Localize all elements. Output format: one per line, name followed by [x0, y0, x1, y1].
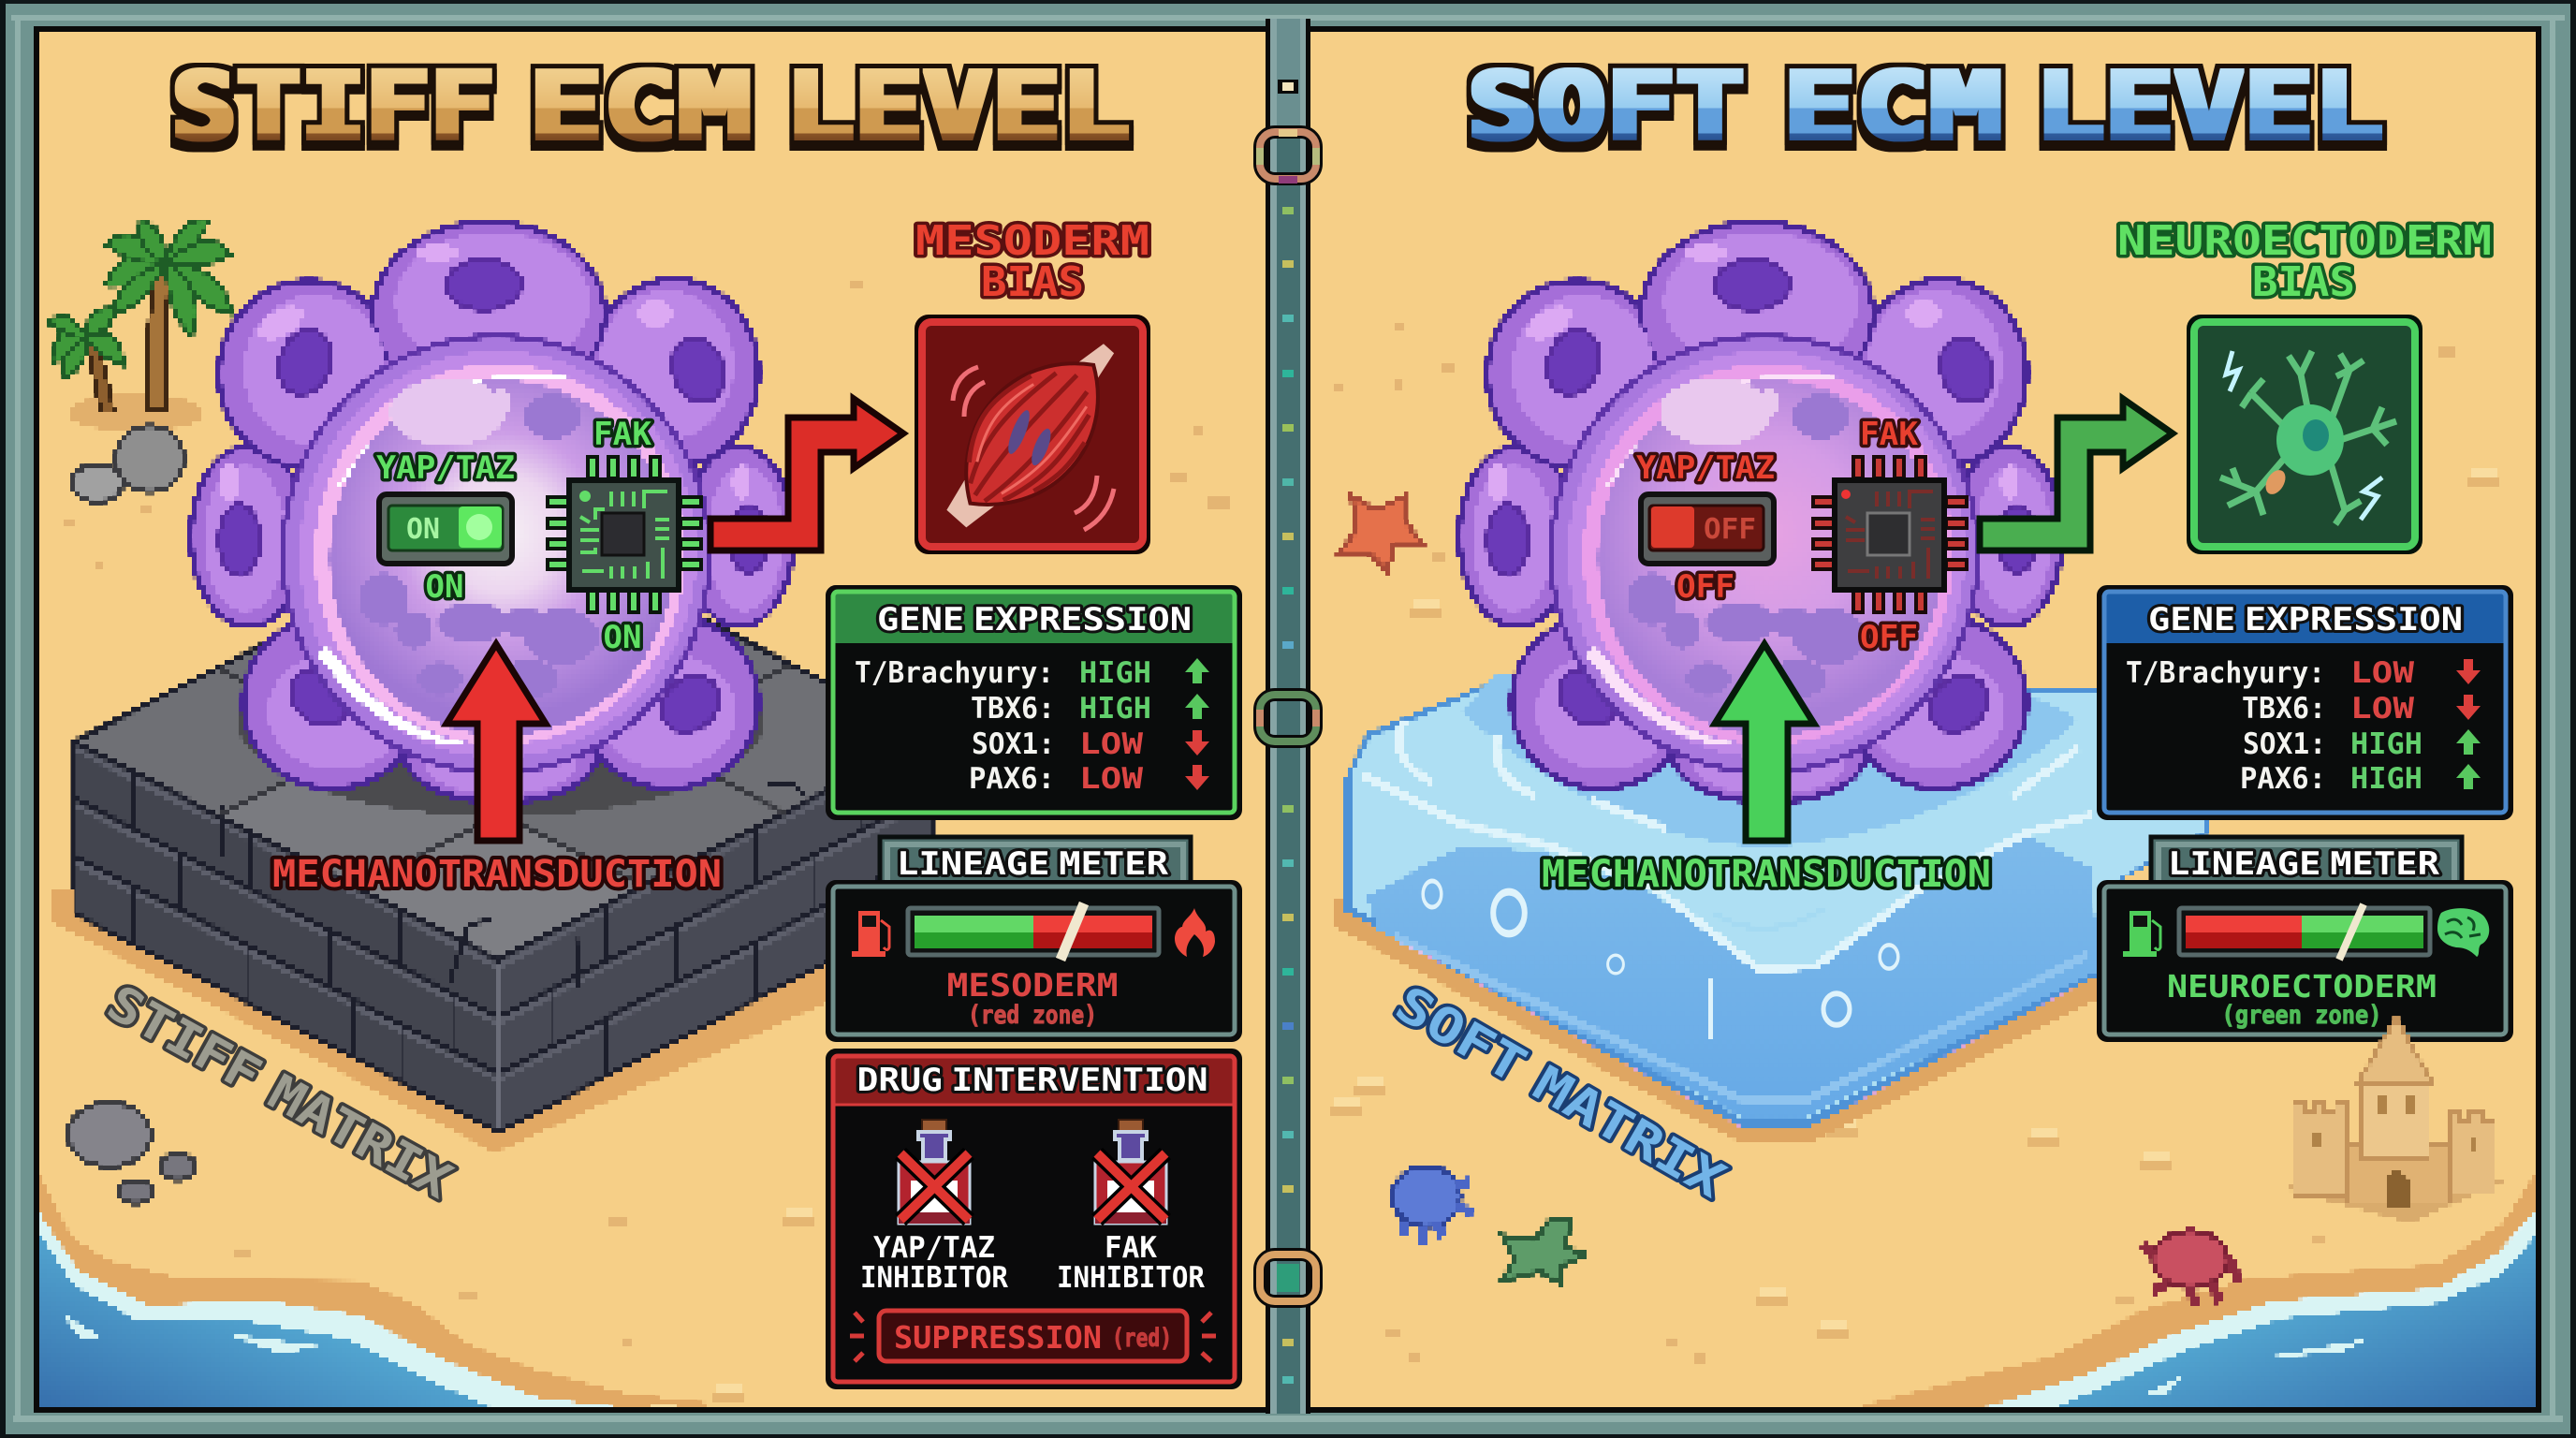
- gene title: GENE EXPRESSION: [877, 601, 1192, 638]
- starfish green: [1502, 1221, 1587, 1284]
- gene rows: HIGH: [1079, 692, 1151, 726]
- lineage bar soft: [2179, 904, 2430, 960]
- icon: fuel pump green: [2123, 911, 2160, 957]
- arrow: to mesoderm: [710, 399, 903, 550]
- gene rows soft: SOX1:: [2243, 727, 2326, 761]
- gene rows: [855, 656, 1209, 796]
- gene rows soft: [2126, 656, 2481, 796]
- gel bubbles: [1423, 881, 1898, 1025]
- suppression badge: SUPPRESSION: [894, 1319, 1102, 1356]
- lineage title: LINEAGE METER: [897, 845, 1169, 883]
- starfish orange: [1340, 496, 1421, 571]
- icon: fuel pump: [852, 911, 889, 957]
- gene rows: SOX1:: [972, 727, 1055, 761]
- gene rows soft: LOW: [2350, 692, 2414, 726]
- gene rows: HIGH: [1079, 656, 1151, 690]
- label: YAP/TAZ state: ON: [426, 568, 463, 606]
- chip: FAK on: [548, 457, 701, 612]
- heading: mesoderm bias: BIAS: [981, 258, 1084, 306]
- arrow: mechanotransduction up: [446, 644, 546, 841]
- sand mounds right: [1330, 468, 2499, 1339]
- sandcastle: [2284, 1018, 2503, 1223]
- switch off: [1641, 494, 1774, 564]
- soft matrix gel: [1335, 670, 2207, 1144]
- crab red: [2144, 1225, 2239, 1306]
- gene rows soft: PAX6:: [2240, 762, 2326, 796]
- panel: gene expression soft: [2100, 588, 2510, 817]
- lineage result soft: (green zone): [2222, 1001, 2381, 1030]
- sand mounds: [647, 1208, 814, 1423]
- label: YAP/TAZ off: YAP/TAZ: [1636, 449, 1775, 487]
- organoid soft: [1459, 222, 2062, 802]
- gene rows: LOW: [1079, 727, 1143, 761]
- switch off: OFF: [1704, 513, 1756, 546]
- panel: drug intervention: [828, 1051, 1239, 1387]
- lineage bar: [908, 903, 1159, 960]
- chip: FAK off: [1813, 457, 1967, 612]
- title: stiff ECM level: ECM: [529, 51, 752, 161]
- panel: soft ECM level: [1310, 32, 2536, 1407]
- title: soft ECM level: SOFT: [1468, 51, 1745, 161]
- label: stiff matrix: STIFF MATRIX: [97, 976, 461, 1211]
- gene rows soft: TBX6:: [2242, 692, 2326, 726]
- heading: neuroectoderm bias: BIAS: [2252, 258, 2355, 306]
- title: stiff ECM level: STIFF: [172, 51, 494, 161]
- heading: mesoderm bias: [915, 217, 1149, 306]
- potion: YAP/TAZ inhibitor: [899, 1120, 970, 1224]
- label: FAK inhibitor: [1057, 1231, 1205, 1295]
- label: YAP/TAZ inhibitor: INHIBITOR: [860, 1261, 1008, 1295]
- palm trees: [49, 220, 231, 432]
- potion: FAK inhibitor: [1095, 1120, 1166, 1224]
- suppression badge: (red): [1112, 1324, 1172, 1353]
- suppression badge: [850, 1311, 1216, 1361]
- icon: muscle: [917, 314, 1148, 553]
- label: FAK inhibitor: INHIBITOR: [1057, 1261, 1205, 1295]
- gene rows soft: LOW: [2350, 656, 2414, 690]
- organoid stiff: [191, 222, 794, 802]
- panel: stiff ECM level: [39, 32, 1266, 1407]
- title: stiff ECM level: LEVEL: [785, 51, 1130, 161]
- connector ring top: [1260, 129, 1316, 183]
- label: YAP/TAZ inhibitor: [860, 1231, 1008, 1295]
- label: soft matrix: SOFT MATRIX: [1385, 976, 1734, 1210]
- gene rows: LOW: [1079, 762, 1143, 796]
- membrane glow: [315, 364, 685, 744]
- label: FAK: FAK: [593, 416, 652, 453]
- sand specks right: [1334, 323, 2455, 1364]
- lineage result: MESODERM: [947, 967, 1118, 1005]
- label: YAP/TAZ inhibitor: YAP/TAZ: [873, 1231, 995, 1265]
- title: soft ECM level: ECM: [1783, 51, 2002, 161]
- lineage result: [947, 967, 1118, 1030]
- icon: brain: [2437, 908, 2489, 957]
- label: FAK inhibitor: FAK: [1105, 1231, 1157, 1265]
- icon: neuron: [2189, 317, 2420, 551]
- panel: gene expression: [828, 588, 1239, 817]
- sand specks: [64, 281, 1230, 1346]
- arrow: to neuroectoderm: [1980, 399, 2173, 550]
- title: stiff ECM level: [172, 51, 1130, 161]
- switch on: ON: [406, 513, 440, 546]
- label: YAP/TAZ state off: OFF: [1676, 568, 1734, 606]
- gene title soft: GENE EXPRESSION: [2148, 601, 2463, 638]
- gene rows soft: HIGH: [2350, 762, 2422, 796]
- gene rows soft: HIGH: [2350, 727, 2422, 761]
- connector ring bottom: [1260, 1255, 1316, 1301]
- arrow: mechanotransduction up green: [1715, 644, 1814, 841]
- icon: flame: [1175, 908, 1215, 957]
- panel: lineage meter: [828, 837, 1239, 1039]
- panel: lineage meter soft: [2100, 837, 2510, 1039]
- lineage result soft: [2167, 968, 2437, 1030]
- heading: neuroectoderm bias: NEUROECTODERM: [2117, 217, 2492, 265]
- heading: mesoderm bias: MESODERM: [915, 217, 1149, 265]
- connector ring middle: [1260, 695, 1316, 741]
- label: YAP/TAZ on: YAP/TAZ: [376, 449, 515, 487]
- heading: neuroectoderm bias: [2117, 217, 2492, 306]
- label: mechanotransduction: MECHANOTRANSDUCTION: [272, 853, 722, 896]
- switch on: [379, 494, 512, 564]
- title: soft ECM level: LEVEL: [2035, 51, 2383, 161]
- label: FAK off: FAK: [1860, 416, 1919, 453]
- gene rows: TBX6:: [971, 692, 1055, 726]
- lineage result soft: NEUROECTODERM: [2167, 968, 2437, 1005]
- octopus blue: [1393, 1167, 1471, 1243]
- rocks near palms: [72, 426, 183, 502]
- drug title: DRUG INTERVENTION: [857, 1062, 1208, 1099]
- title: soft ECM level: [1468, 51, 2383, 161]
- beach water: [0, 1176, 705, 1414]
- divider gems: [1282, 207, 1294, 1384]
- lineage result: (red zone): [968, 1001, 1097, 1030]
- gene rows soft: T/Brachyury:: [2126, 656, 2325, 690]
- lineage title soft: LINEAGE METER: [2168, 845, 2440, 883]
- stiff matrix stone platform: [51, 519, 931, 1152]
- rocks lower left: [68, 1103, 195, 1203]
- beach water right: [1863, 1173, 2546, 1414]
- label: mechanotransduction soft: MECHANOTRANSDUCTION: [1542, 853, 1991, 896]
- gene rows: T/Brachyury:: [855, 656, 1054, 690]
- label: FAK state: ON: [604, 619, 641, 656]
- label: FAK state off: OFF: [1860, 619, 1918, 656]
- gene rows: PAX6:: [969, 762, 1055, 796]
- center divider: [1260, 19, 1316, 1414]
